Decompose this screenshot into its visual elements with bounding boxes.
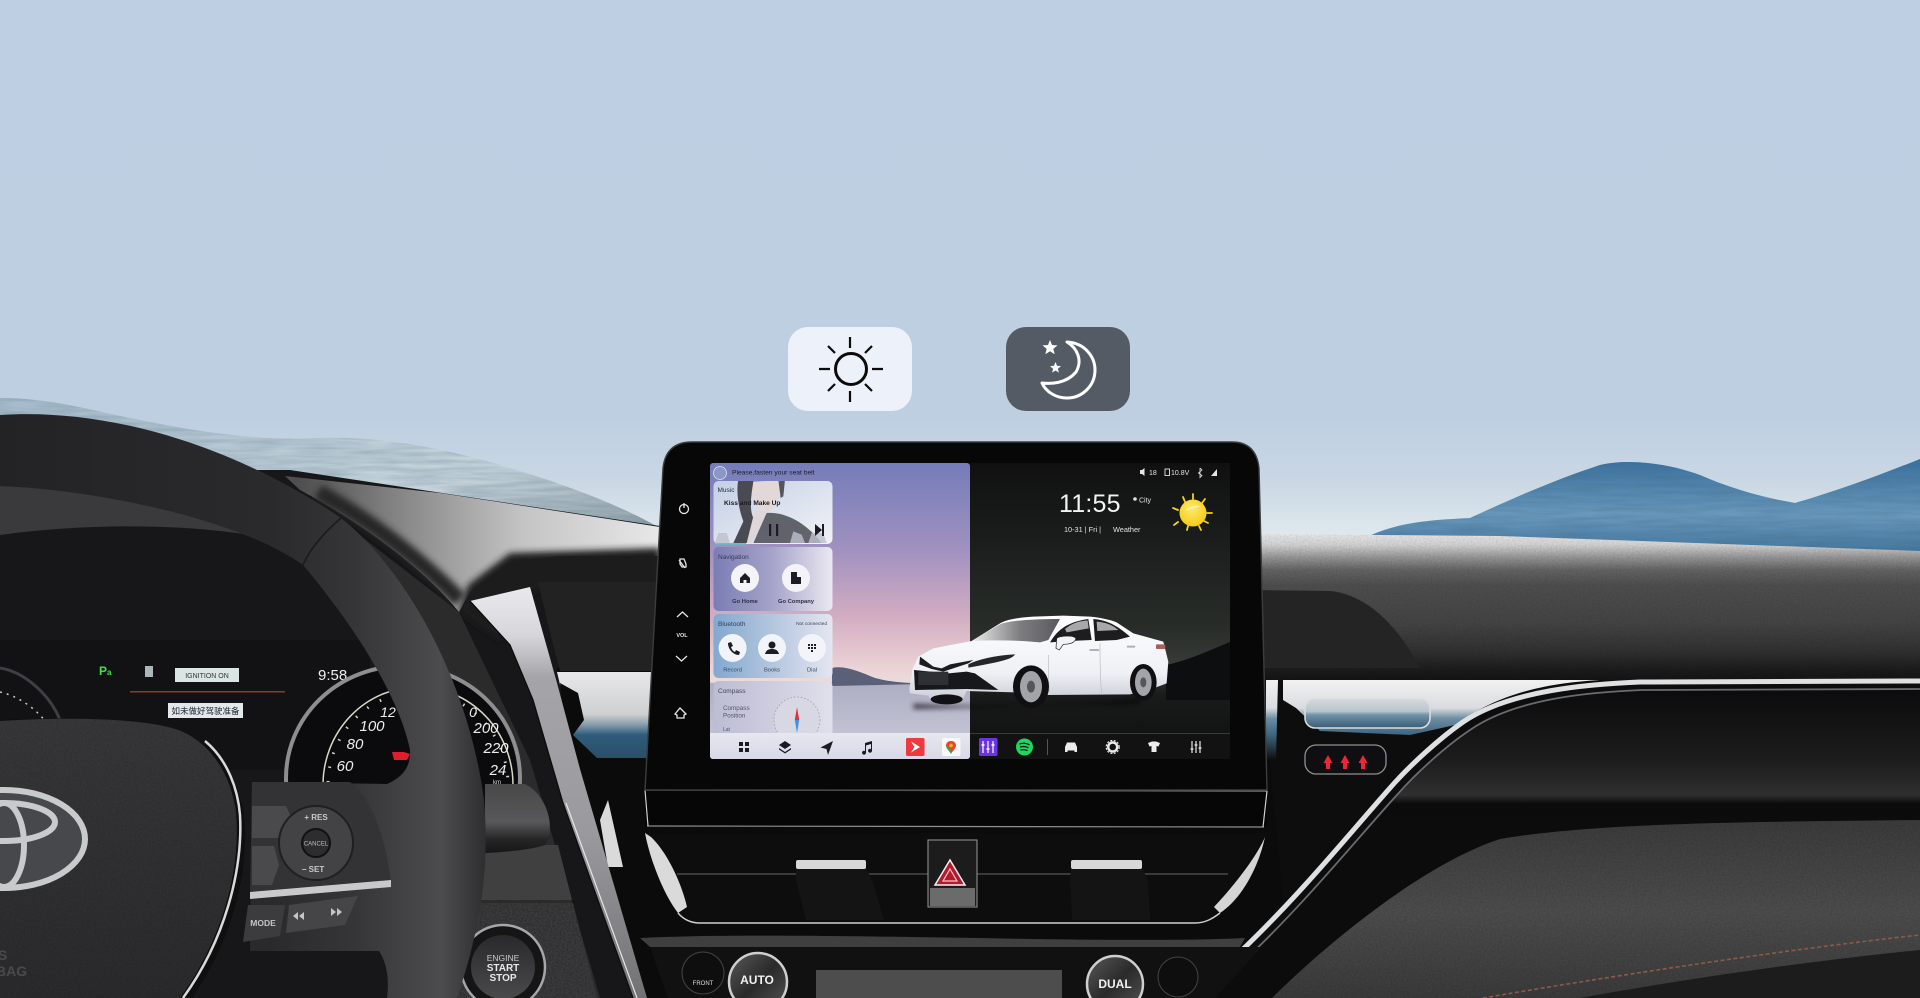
cruise cluster: [279, 806, 353, 880]
card: bluetooth: Bluetooth: [718, 621, 746, 628]
instrument cluster: IGNITION ON: [185, 673, 229, 680]
DUAL knob: [1087, 956, 1143, 998]
card: bluetooth: Dial: [807, 668, 817, 674]
card: compass: Lat: [723, 727, 731, 733]
left trim, vent recess and gloss insert: [470, 582, 660, 998]
climate controls strip: DUAL: [1098, 977, 1132, 991]
instrument cluster: 100: [359, 718, 385, 735]
engine start button: ENGINE: [487, 953, 520, 963]
card: bluetooth: Books: [764, 668, 780, 674]
speedometer: [286, 666, 520, 890]
engine start button: START: [487, 963, 519, 974]
dashboard: left base and instrument hood: [0, 470, 660, 998]
instrument cluster: 200: [472, 720, 499, 737]
icon: music: [862, 741, 872, 755]
card: bluetooth: [714, 614, 832, 678]
head unit bezel: [645, 442, 1267, 790]
vent recess: [538, 582, 660, 671]
engine start button: [461, 925, 545, 998]
bezel hard keys: [675, 503, 688, 718]
steering wheel controls: MODE: [250, 918, 276, 928]
status bar: [1140, 468, 1217, 478]
card: compass: Position: [723, 712, 746, 720]
icon: power: [680, 503, 688, 514]
instrument cluster: 12: [380, 704, 396, 720]
instrument cluster: 220: [482, 740, 509, 757]
icon: layers: [779, 741, 791, 754]
climate controls strip: FRONT: [693, 981, 714, 987]
icon tile: night mode moon: [1006, 327, 1130, 411]
air vents and hazard button: [645, 833, 1267, 923]
card: navigation: [714, 547, 832, 611]
card: compass: [714, 681, 832, 733]
head unit chin bar: [645, 790, 1267, 827]
gloss insert: [557, 672, 660, 769]
icon: sliders: [1190, 741, 1202, 753]
steering wheel controls: [243, 782, 391, 942]
clock and weather widget: [1059, 490, 1212, 534]
card: bluetooth: Record: [723, 668, 742, 674]
car: white sedan: [909, 616, 1168, 709]
rear defrost button: [1158, 957, 1198, 997]
car body: [909, 616, 1168, 702]
AUTO knob: [729, 953, 787, 998]
instrument cluster: 60: [337, 758, 354, 775]
buttons: centre-right pill: [1305, 699, 1430, 728]
icon tile: day mode sun: [788, 327, 912, 411]
instrument cluster: a: [107, 668, 112, 677]
centre console black surround: [557, 668, 1420, 998]
status bar: 10.8V: [1171, 470, 1190, 477]
engine start button: STOP: [489, 973, 517, 984]
card: compass: Compass: [723, 705, 750, 712]
clock and weather widget: 11:55: [1059, 490, 1121, 518]
car side windows: [1050, 619, 1092, 642]
vent lever right: [1070, 868, 1150, 920]
icon: volume down: [676, 656, 687, 661]
card: navigation: Navigation: [718, 554, 749, 561]
status notice: Please,fasten your seat belt: [732, 470, 815, 476]
icon: spotify: [1016, 738, 1033, 756]
cruise cluster: + RES: [304, 813, 328, 822]
icon: mute: [679, 559, 686, 568]
mountains: left snowy: [0, 398, 660, 560]
icon: shirt: [1148, 742, 1160, 752]
instrument cluster: [0, 640, 520, 890]
dock: light icons: [739, 738, 1202, 756]
card: bluetooth: Not connected: [796, 621, 827, 627]
icon: red player: [906, 738, 924, 756]
icon: sun weather: [1173, 494, 1212, 530]
dashboard pad: [285, 476, 660, 612]
status bar: 18: [1149, 470, 1157, 477]
black reflection: [560, 683, 607, 810]
card: music: [714, 480, 832, 544]
instrument cluster: 如未做好驾驶准备: [171, 706, 240, 716]
dock separator: [1047, 739, 1048, 755]
instrument cluster: 0: [469, 704, 477, 720]
silver bar: [250, 880, 391, 899]
front defrost button: [682, 952, 724, 994]
icon: volume up: [677, 612, 688, 617]
climate controls strip: AUTO: [740, 973, 774, 987]
icon: maps: [942, 738, 960, 756]
clock and weather widget: Weather: [1113, 525, 1141, 534]
grey surround of gauge: [340, 520, 600, 998]
card: navigation: Go Company: [778, 599, 815, 605]
instrument cluster: 80: [347, 736, 364, 753]
rear wheel: [1130, 664, 1157, 701]
dashboard: right black gloss panel and trim: [1195, 680, 1920, 998]
steering wheel ring and spoke: [0, 414, 486, 998]
mountains: right blue: [1369, 459, 1920, 560]
icon: settings: [1106, 740, 1119, 754]
car shadow: [913, 699, 1140, 709]
label: VOL: VOL: [676, 633, 688, 639]
car lower grille: [914, 670, 998, 690]
left wheel buttons: [252, 806, 290, 838]
card: music: Music: [718, 487, 735, 494]
instrument cluster: 24: [489, 762, 506, 779]
steering wheel airbag hub: [0, 718, 245, 998]
car windshield: [972, 619, 1060, 642]
cruise cluster: CANCEL: [304, 842, 329, 848]
car mirror: [1056, 636, 1076, 650]
lower buttons: [243, 905, 285, 942]
indicator: passenger airbag arrows: [1305, 745, 1386, 774]
card: music: Kiss and Make Up: [724, 500, 780, 507]
cluster readouts: P: [99, 664, 107, 678]
icon: home: [675, 708, 686, 718]
front wheel: [1013, 665, 1049, 708]
stalk and lower console left of centre: [455, 784, 597, 998]
clock and weather widget: City: [1139, 498, 1152, 504]
screen: dark half: [970, 463, 1230, 759]
icon: car: [1065, 742, 1077, 752]
leather lower dash: [1272, 820, 1920, 998]
instrument cluster: km: [493, 780, 501, 786]
climate controls strip: [640, 936, 1262, 998]
card: compass: Compass: [718, 688, 746, 695]
status notice: [714, 466, 815, 480]
icon: grid: [739, 742, 749, 752]
clock and weather widget: 10-31 | Fri |: [1064, 525, 1101, 534]
cruise cluster: − SET: [302, 865, 324, 874]
silver trim strip: [470, 587, 647, 998]
dashboard: right upper padded surface: [1255, 534, 1920, 684]
car headlight: [968, 654, 1015, 668]
lower white reflection: [600, 800, 623, 867]
hazard switch: [928, 840, 977, 907]
car front left tyre: [931, 694, 963, 704]
icon: equalizer app: [979, 738, 998, 756]
screen: light half: [710, 463, 970, 759]
card: navigation: Go Home: [732, 599, 759, 605]
icon: navigate: [820, 741, 833, 755]
car door lines and handles: [1048, 643, 1102, 692]
Toyota logo: [0, 790, 85, 888]
instrument cluster: 9:58: [318, 667, 347, 684]
vent lever left: [796, 868, 884, 920]
